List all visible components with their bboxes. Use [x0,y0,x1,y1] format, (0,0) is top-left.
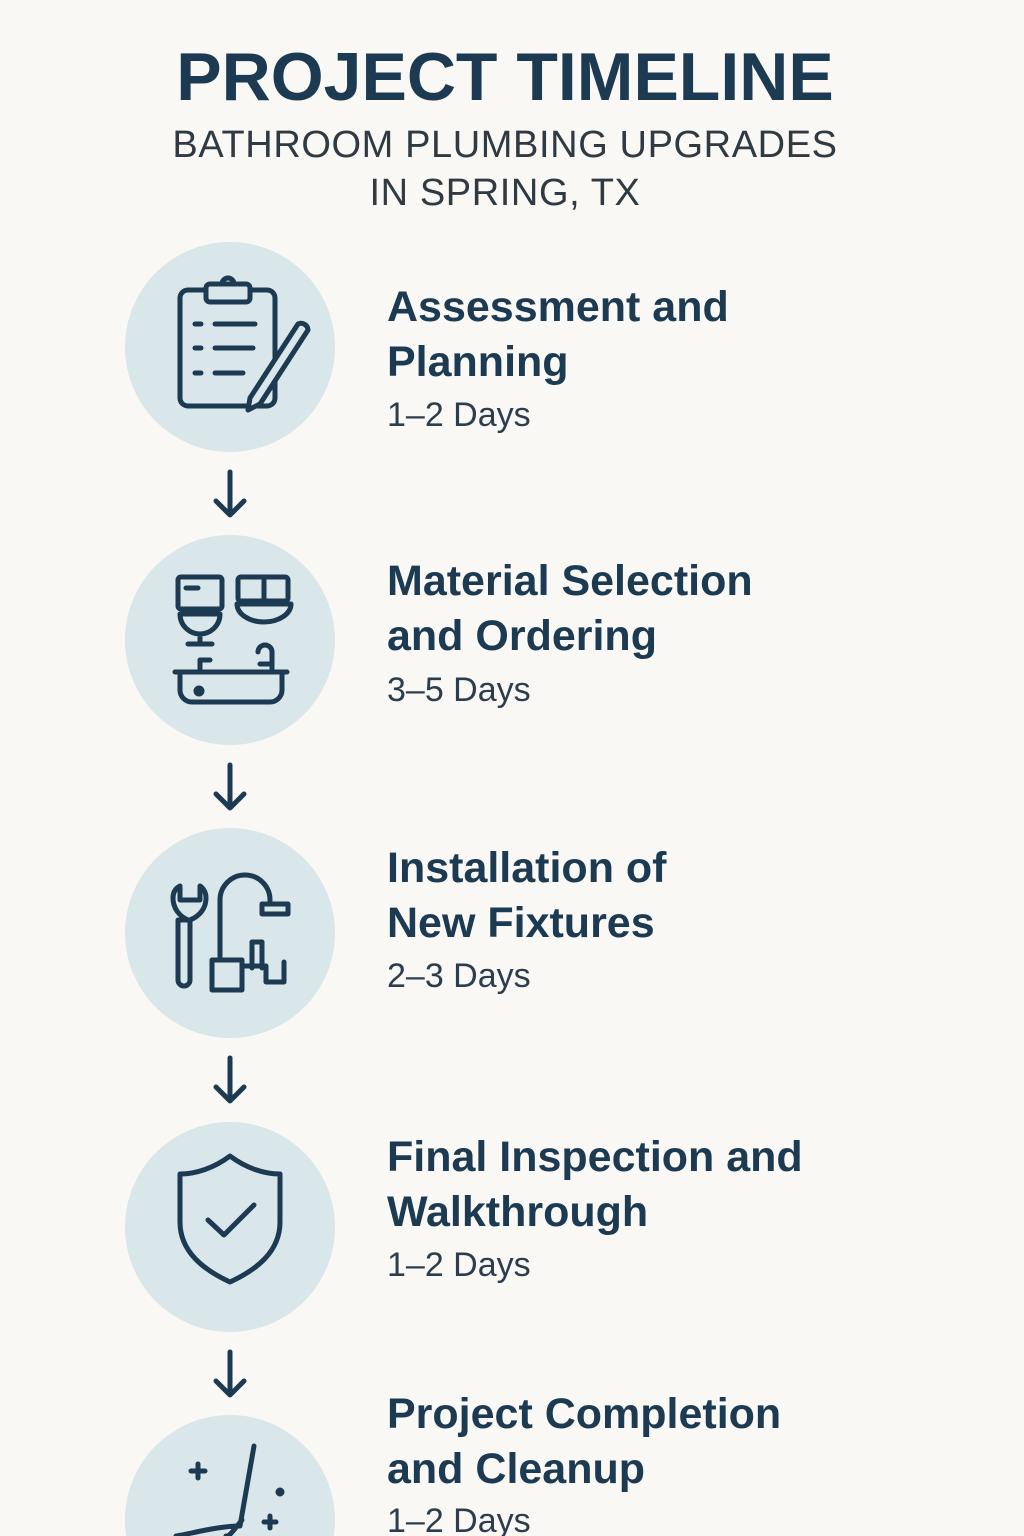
step 5: Project Completion [387,1390,781,1438]
step 2 [387,557,753,660]
circle 3 [125,828,335,1038]
circle 2 [125,535,335,745]
icon: wrench and faucet [173,875,288,990]
arrows [216,472,244,1395]
step 4: Walkthrough [387,1188,648,1236]
icon: shield check [180,1156,280,1282]
title: PROJECT TIMELINE [176,39,834,115]
step 1: Assessment and [387,283,729,331]
step 1: Planning [387,338,569,386]
text: 1–2 Days [387,1246,531,1284]
step 4: Final Inspection and [387,1133,803,1181]
subtitle: IN SPRING, TX [369,172,641,214]
step 5 [387,1390,781,1493]
step 5: and Cleanup [387,1445,645,1493]
circle 5 [125,1415,335,1536]
step 2: and Ordering [387,612,657,660]
text: 3–5 Days [387,671,531,709]
step 3: Installation of [387,844,666,892]
text: 1–2 Days [387,396,531,434]
step 1 [387,283,729,386]
subtitle [172,124,838,214]
circle 1 [125,242,335,452]
icon: clipboard [180,278,308,410]
subtitle: BATHROOM PLUMBING UPGRADES [172,124,838,166]
step 3 [387,844,667,947]
step 4 [387,1133,803,1236]
circle 4 [125,1122,335,1332]
step 3: New Fixtures [387,899,655,947]
step 2: Material Selection [387,557,753,605]
icon: broom sparkles [176,1446,282,1536]
text: 2–3 Days [387,957,531,995]
icon: fixtures [175,577,291,702]
